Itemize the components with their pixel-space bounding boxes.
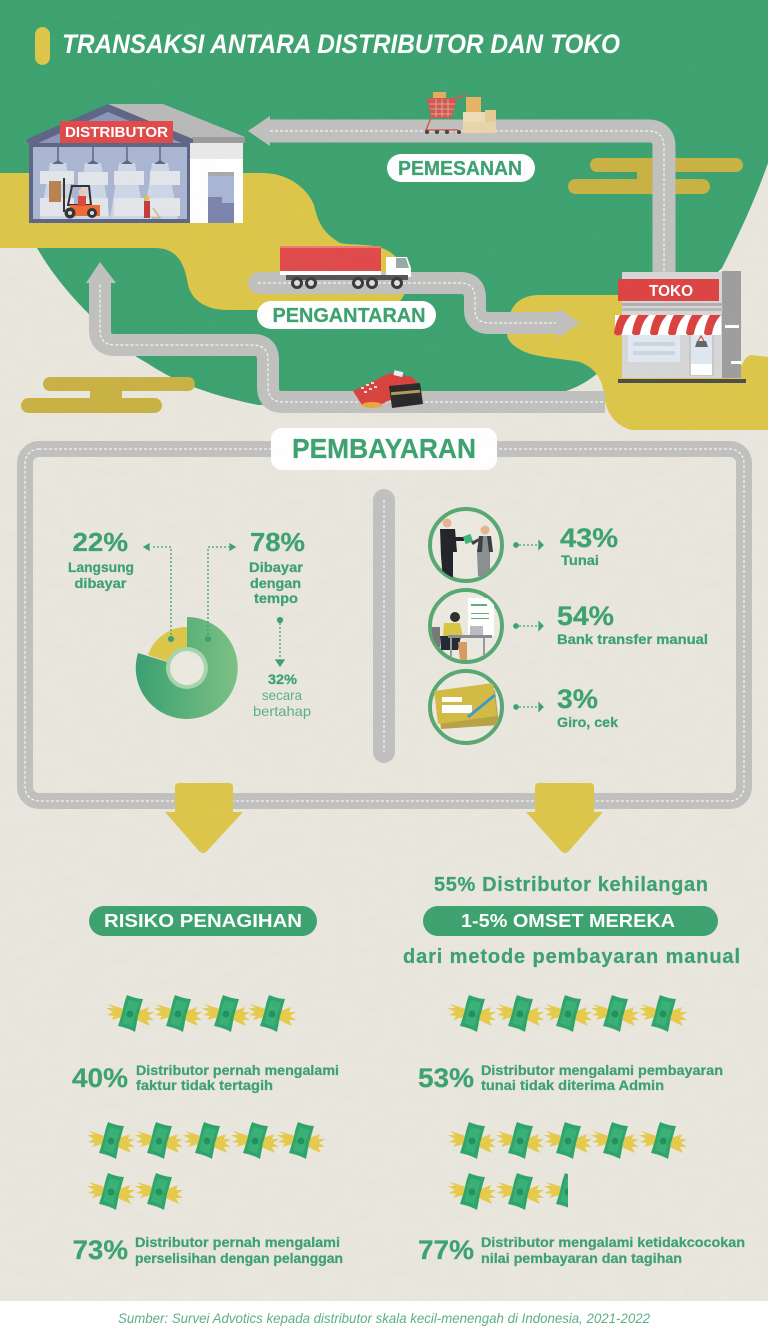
arrow: right yellow down — [526, 783, 603, 853]
icon: giro cheque — [430, 671, 502, 743]
icon: shopping cart and boxes — [425, 92, 496, 134]
stat: 73 percent customer disputes: perselisihan dengan pelanggan — [135, 1250, 343, 1266]
icon: bank transfer at desk — [430, 590, 502, 662]
heading: pembayaran: PEMBAYARAN — [292, 433, 476, 464]
leader: 22 percent — [144, 544, 174, 642]
stat: 40 percent uncollected invoices: faktur tidak tertagih — [136, 1077, 273, 1093]
arrow road: pembayaran — [86, 262, 605, 402]
pictogram: 77 percent right — [448, 1122, 687, 1210]
stat: 54 percent manual bank transfer — [557, 601, 708, 647]
label: pemesanan: PEMESANAN — [398, 158, 522, 180]
arrow road: pengantaran — [248, 272, 580, 338]
stat: 78 percent paid on terms: tempo — [254, 590, 298, 606]
stat: 22 percent directly paid: 22% — [72, 527, 128, 557]
stat: 77 percent payment mismatch: 77% — [418, 1235, 474, 1265]
pictogram: 73 percent left — [87, 1122, 325, 1210]
stat: 54 percent manual bank transfer: 54% — [557, 601, 614, 631]
sign: distributor — [60, 121, 173, 143]
sign: distributor: DISTRIBUTOR — [65, 124, 168, 141]
arrow: bank transfer dotted — [514, 622, 543, 630]
central road divider — [373, 489, 395, 763]
stat: 78 percent paid on terms: dengan — [250, 575, 301, 591]
stat: 22 percent directly paid: dibayar — [74, 575, 127, 591]
stat: 40 percent uncollected invoices: Distributor pernah mengalami — [136, 1062, 339, 1078]
stat: 43 percent cash: Tunai — [561, 552, 599, 568]
stat: 78 percent paid on terms — [249, 527, 305, 606]
stat: 40 percent uncollected invoices — [72, 1062, 339, 1093]
leader: 78 percent — [206, 544, 235, 642]
heading: 55 percent lose revenue — [403, 874, 740, 968]
icon: forklift — [49, 178, 100, 218]
chart: payment timing donut — [136, 617, 238, 719]
sign: toko: TOKO — [649, 283, 693, 300]
stat: 22 percent directly paid — [68, 527, 134, 591]
stat: 73 percent customer disputes: Distributor pernah mengalami — [135, 1234, 340, 1250]
title accent bar — [35, 27, 50, 65]
stat: 73 percent customer disputes — [72, 1234, 343, 1266]
icon: warehouse worker — [144, 196, 160, 218]
icon: distributor warehouse — [27, 104, 245, 223]
stat: 53 percent cash not received — [418, 1062, 723, 1093]
heading: risiko penagihan: RISIKO PENAGIHAN — [104, 911, 302, 931]
stat: 32 percent in stages: secara — [262, 687, 302, 703]
stat: 3 percent giro: Giro, cek — [557, 714, 618, 730]
footer strip — [0, 1301, 768, 1337]
label: pengantaran: PENGANTARAN — [272, 305, 426, 327]
green circular backdrop — [0, 0, 768, 405]
icon: card payment terminal — [353, 370, 423, 408]
stat: 32 percent in stages: bertahap — [253, 703, 311, 719]
stat: 43 percent cash — [560, 523, 618, 568]
arrow road: pemesanan — [248, 116, 664, 275]
heading: risiko penagihan — [89, 906, 317, 936]
stat: 78 percent paid on terms: 78% — [250, 527, 305, 557]
icon: toko storefront — [614, 271, 746, 383]
yellow blob: right — [507, 295, 768, 430]
stat: 53 percent cash not received: Distributor mengalami pembayaran — [481, 1062, 723, 1078]
label: pengantaran — [257, 301, 436, 329]
stat: 77 percent payment mismatch — [418, 1234, 745, 1266]
stat: 32 percent in stages: 32% — [268, 671, 298, 687]
stat: 3 percent giro — [557, 684, 618, 730]
pictogram: 40 percent left — [106, 995, 296, 1032]
arrow: cash dotted — [514, 541, 543, 549]
stat: 43 percent cash: 43% — [560, 523, 618, 553]
stat: 40 percent uncollected invoices: 40% — [72, 1063, 128, 1093]
source note: Sumber: Survei Advotics kepada distributor skala kecil-menengah di Indonesia, 2021-2022 — [118, 1310, 650, 1326]
stat: 54 percent manual bank transfer: Bank transfer manual — [557, 631, 708, 647]
stat: 53 percent cash not received: tunai tidak diterima Admin — [481, 1077, 664, 1093]
decorative yellow dashes: bottom left — [21, 377, 195, 413]
heading: 55 percent lose revenue: 1-5% OMSET MEREKA — [461, 911, 675, 931]
stat: 78 percent paid on terms: Dibayar — [249, 559, 304, 575]
icon: cash handover — [430, 509, 502, 581]
panel: pembayaran frame road — [25, 449, 744, 801]
stat: 77 percent payment mismatch: nilai pembayaran dan tagihan — [481, 1250, 682, 1266]
title: TRANSAKSI ANTARA DISTRIBUTOR DAN TOKO — [62, 29, 620, 59]
heading: 55 percent lose revenue: 55% Distributor kehilangan — [434, 874, 708, 896]
stat: 53 percent cash not received: 53% — [418, 1063, 474, 1093]
decorative yellow dashes: top right — [568, 158, 743, 194]
stat: 3 percent giro: 3% — [557, 684, 598, 714]
stat: 73 percent customer disputes: 73% — [72, 1235, 128, 1265]
leader: 32 percent — [276, 618, 284, 666]
icon: truck — [280, 246, 411, 289]
heading: 55 percent lose revenue: dari metode pembayaran manual — [403, 946, 740, 968]
label: pemesanan — [387, 154, 535, 182]
stat: 22 percent directly paid: Langsung — [68, 559, 134, 575]
stat: 32 percent in stages — [253, 671, 311, 719]
arrow: left yellow down — [165, 783, 243, 853]
pictogram: 53 percent right — [448, 995, 687, 1032]
heading: pembayaran — [271, 428, 497, 470]
arrow: giro dotted — [514, 703, 543, 711]
yellow blob: left — [0, 173, 406, 310]
stat: 77 percent payment mismatch: Distributor mengalami ketidakcocokan — [481, 1234, 745, 1250]
